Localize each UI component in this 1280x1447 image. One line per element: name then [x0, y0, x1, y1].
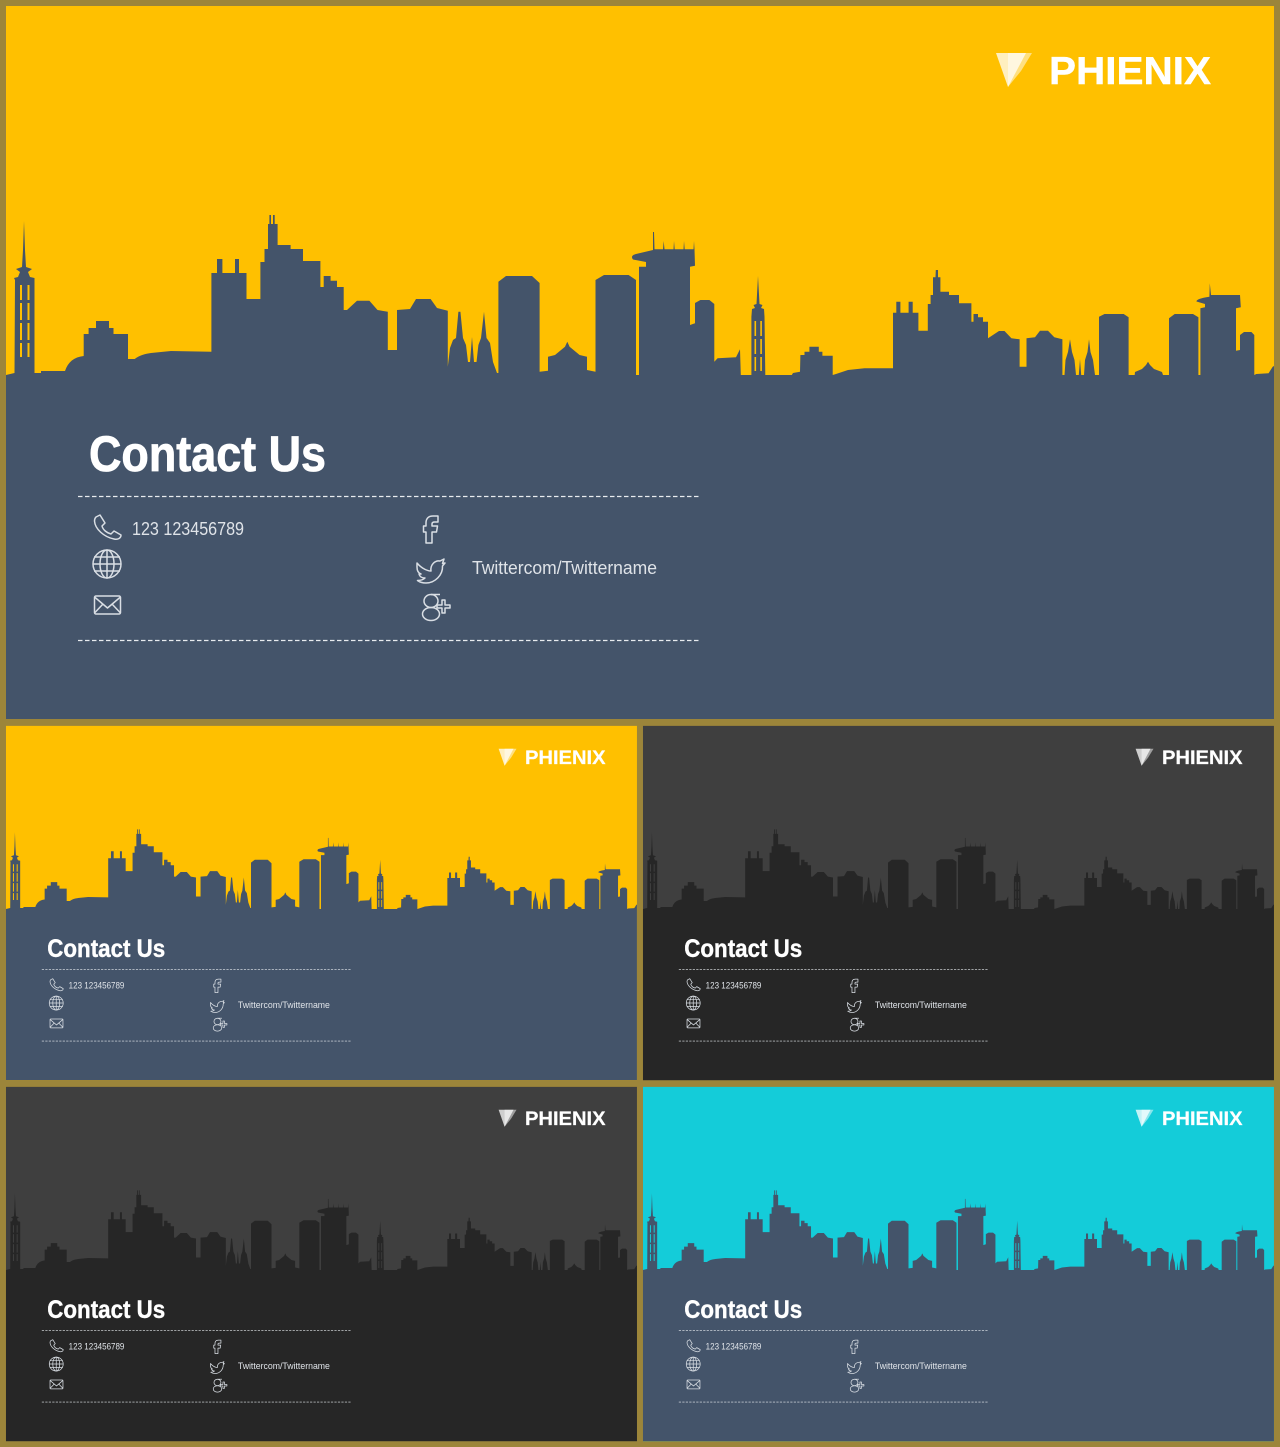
- logo: PHIENIX: [1162, 747, 1243, 769]
- city skyline: [643, 829, 1274, 1080]
- logo: PHIENIX: [525, 747, 606, 769]
- icon: envelope: [687, 1380, 700, 1389]
- heading: Contact Us: [89, 426, 326, 482]
- icon: phone: [94, 515, 121, 539]
- icon: google plus: [850, 1018, 864, 1031]
- city skyline: [6, 829, 637, 1080]
- icon: phone: [687, 1340, 700, 1352]
- divider top: [78, 496, 700, 498]
- icon: google plus: [850, 1379, 864, 1392]
- divider bottom: [78, 640, 700, 642]
- icon: facebook: [214, 979, 221, 993]
- panel sky: [643, 726, 1274, 1080]
- city skyline: [6, 1190, 637, 1441]
- twitter handle: Twittercom/Twittername: [875, 1361, 967, 1371]
- twitter handle: Twittercom/Twittername: [238, 1000, 330, 1010]
- divider top: [679, 968, 988, 970]
- icon: twitter: [417, 559, 445, 583]
- icon: envelope: [94, 596, 120, 614]
- icon: globe: [93, 550, 121, 578]
- heading: Contact Us: [684, 1296, 802, 1324]
- icon: phone: [50, 1340, 63, 1352]
- phone number: 123 123456789: [706, 1342, 761, 1352]
- icon: facebook: [851, 1340, 858, 1354]
- icon: envelope: [50, 1019, 63, 1028]
- logo: PHIENIX: [525, 1108, 606, 1130]
- heading: Contact Us: [684, 935, 802, 963]
- icon: google plus: [213, 1379, 227, 1392]
- panel sky: [6, 1087, 637, 1441]
- panel: yellow variant: [6, 726, 637, 1080]
- icon: globe: [49, 996, 63, 1010]
- divider top: [42, 968, 351, 970]
- divider top: [42, 1329, 351, 1331]
- icon: phone: [687, 979, 700, 991]
- heading: Contact Us: [47, 935, 165, 963]
- panel sky: [643, 1087, 1274, 1441]
- icon: google plus: [213, 1018, 227, 1031]
- twitter handle: Twittercom/Twittername: [238, 1361, 330, 1371]
- icon: globe: [686, 996, 700, 1010]
- icon: facebook: [851, 979, 858, 993]
- icon: phone: [50, 979, 63, 991]
- panel: main yellow contact slide: [6, 6, 1274, 719]
- panel: dark variant top right: [643, 726, 1274, 1080]
- icon: globe: [686, 1357, 700, 1371]
- divider bottom: [42, 1401, 351, 1403]
- icon: twitter: [210, 1001, 224, 1013]
- logo: PHIENIX: [1049, 50, 1211, 93]
- city skyline: [643, 1190, 1274, 1441]
- panel sky: [6, 6, 1274, 719]
- divider bottom: [679, 1040, 988, 1042]
- icon: envelope: [50, 1380, 63, 1389]
- divider bottom: [42, 1040, 351, 1042]
- phone number: 123 123456789: [69, 1342, 124, 1352]
- divider top: [679, 1329, 988, 1331]
- twitter handle: Twittercom/Twittername: [875, 1000, 967, 1010]
- panel: dark variant bottom left: [6, 1087, 637, 1441]
- panel: cyan variant: [643, 1087, 1274, 1441]
- divider bottom: [679, 1401, 988, 1403]
- phone number: 123 123456789: [69, 981, 124, 991]
- icon: twitter: [210, 1362, 224, 1374]
- panel sky: [6, 726, 637, 1080]
- icon: globe: [49, 1357, 63, 1371]
- twitter handle: Twittercom/Twittername: [472, 558, 657, 578]
- phone number: 123 123456789: [132, 519, 244, 539]
- city skyline: [6, 215, 1274, 719]
- icon: twitter: [847, 1001, 861, 1013]
- logo: PHIENIX: [1162, 1108, 1243, 1130]
- phone number: 123 123456789: [706, 981, 761, 991]
- icon: facebook: [424, 516, 438, 543]
- icon: google plus: [422, 594, 450, 620]
- heading: Contact Us: [47, 1296, 165, 1324]
- icon: twitter: [847, 1362, 861, 1374]
- icon: envelope: [687, 1019, 700, 1028]
- icon: facebook: [214, 1340, 221, 1354]
